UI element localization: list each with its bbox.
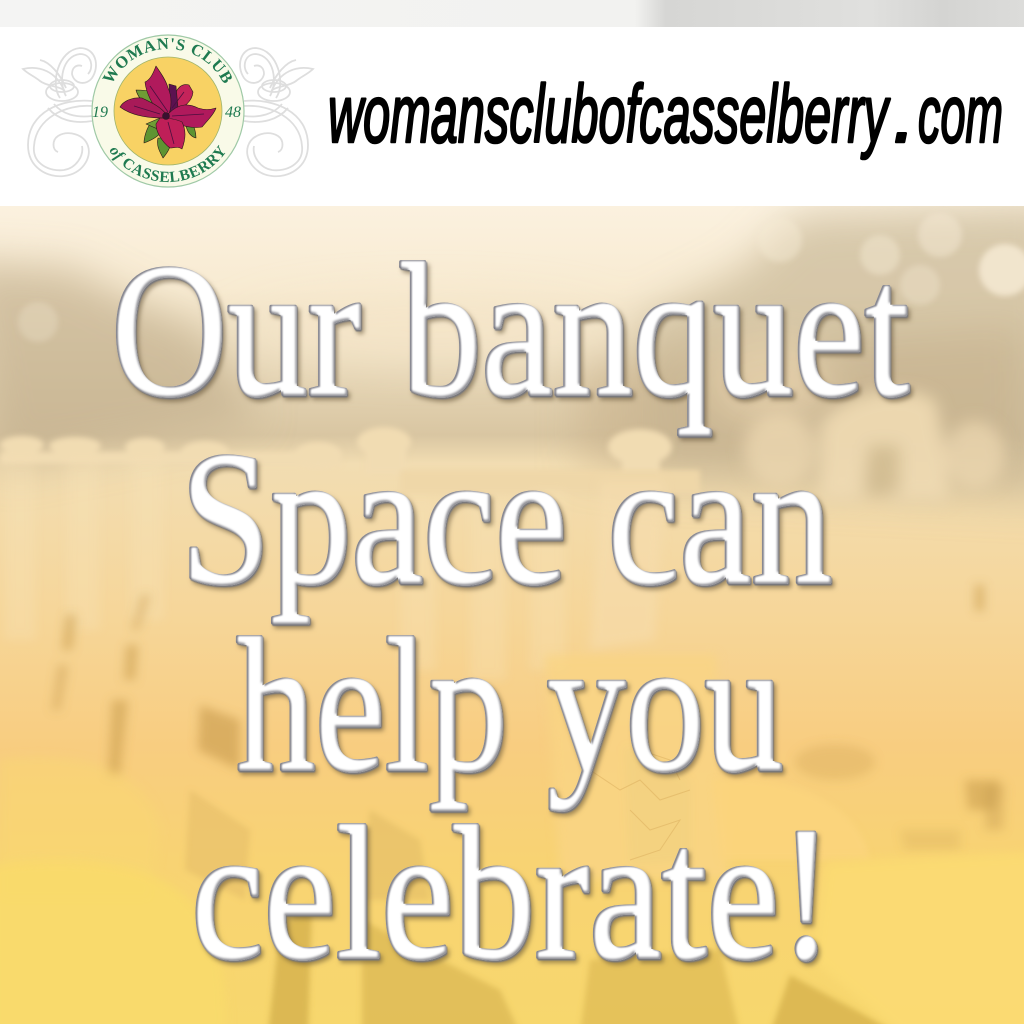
badge ring <box>92 35 244 187</box>
chair slats left <box>4 460 566 680</box>
website address: . <box>893 69 916 160</box>
badge arc text bottom: of CASSELBERRY <box>110 144 226 182</box>
photo background: blurred chairs <box>0 205 1024 1024</box>
headline <box>111 226 909 999</box>
white header band <box>0 27 1024 206</box>
year right: 48 <box>225 104 241 121</box>
logo badge <box>91 34 245 188</box>
marbled card detail <box>590 750 690 860</box>
dark gaps between chair slats <box>52 585 1005 850</box>
top strip of photo <box>0 0 1024 27</box>
icon: hibiscus flower <box>120 66 216 158</box>
chair posts <box>545 480 730 880</box>
chair finials and top rail <box>0 427 700 495</box>
headline line 2: Space can <box>180 414 832 624</box>
badge arc text top: WOMAN'S CLUB <box>102 38 232 83</box>
year left: 19 <box>92 104 108 121</box>
blurred treeline <box>0 205 1024 500</box>
chair rails and shadows, lower <box>185 778 900 1024</box>
distant chairs upper right <box>744 391 1005 500</box>
bokeh highlights <box>18 213 1024 342</box>
yellow chair seats <box>0 758 1024 1024</box>
decorative flourishes behind logo <box>23 48 313 176</box>
headline line 3: help you <box>236 601 783 811</box>
headline line 4: celebrate! <box>191 789 833 999</box>
badge yellow centre <box>114 57 222 165</box>
